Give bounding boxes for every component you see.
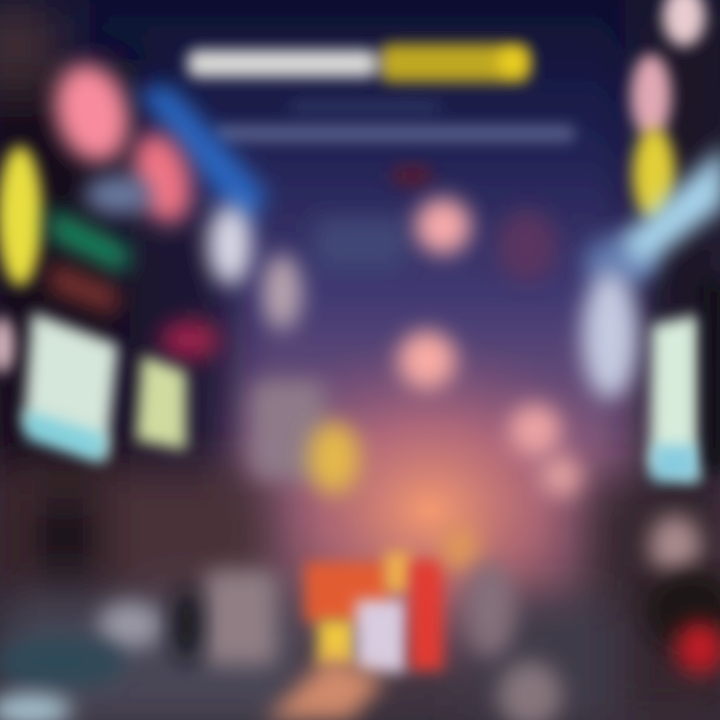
marker: mauve xyxy=(497,210,557,282)
sign: blue grey xyxy=(84,175,152,215)
street: dark car xyxy=(645,570,720,650)
street: crowd lower xyxy=(498,661,562,720)
sign: yellow xyxy=(633,128,675,220)
left signs xyxy=(0,55,360,494)
left dark building mass xyxy=(0,0,300,720)
sign: grey tower xyxy=(250,380,325,480)
street: grey block left xyxy=(205,570,277,665)
bar: red xyxy=(410,560,443,670)
sign: pink large xyxy=(44,55,140,171)
subtitle line two xyxy=(215,126,575,141)
central orange glow xyxy=(215,335,645,685)
sign: red-brown xyxy=(50,262,120,315)
sign: pale blue diagonal xyxy=(620,145,720,270)
marker: faint blue text block xyxy=(315,218,405,270)
sign: pink small xyxy=(124,127,200,229)
sign: yellow xyxy=(0,146,42,286)
bottom street scene xyxy=(0,515,720,720)
sign: white teal panel xyxy=(24,312,118,460)
street: pale block xyxy=(98,601,162,649)
street: road light xyxy=(265,655,385,720)
title white segment xyxy=(188,50,376,77)
sign: pale pink xyxy=(262,254,302,330)
sign: yellow green panel xyxy=(136,355,186,450)
street: dark figure xyxy=(173,587,201,663)
bar: yellow xyxy=(318,620,354,666)
sign: magenta xyxy=(160,320,220,360)
bar: orange red xyxy=(305,562,390,622)
right dark building mass xyxy=(470,0,720,720)
sign: white teal panel xyxy=(650,315,698,480)
title yellow segment xyxy=(380,44,530,82)
street: crowd figure xyxy=(464,562,516,658)
marker: pink three xyxy=(509,404,561,456)
sign: right dark strip xyxy=(704,280,720,470)
title xyxy=(188,44,530,82)
sign: teal panel base xyxy=(24,410,106,462)
sign: blue diagonal xyxy=(135,85,268,228)
centre pink markers xyxy=(315,164,582,497)
bar: lavender white xyxy=(356,600,406,672)
marker: pink two xyxy=(398,331,456,389)
sign: top white xyxy=(663,0,705,46)
subtitle xyxy=(215,102,575,141)
street: pale figure right xyxy=(649,515,701,575)
sign: teal base xyxy=(652,445,698,481)
bar: amber right xyxy=(442,526,478,570)
sign: left edge white xyxy=(0,317,14,373)
bottom centre bars xyxy=(305,526,478,672)
sign: green xyxy=(50,208,130,275)
sign: pale pink xyxy=(631,54,671,138)
marker: dark red top xyxy=(390,164,434,188)
marker: pink four xyxy=(540,455,582,497)
subtitle line one xyxy=(290,102,440,111)
sign: blue band xyxy=(584,236,656,288)
title highlight xyxy=(498,49,526,75)
bar: amber top xyxy=(385,552,411,592)
sign: white xyxy=(208,205,252,285)
street: car highlight xyxy=(0,694,72,720)
street: car teal xyxy=(0,637,125,687)
marker: pink one xyxy=(415,198,471,254)
street: red tail light xyxy=(676,622,720,674)
sign: amber xyxy=(308,422,360,494)
sign: grey blue xyxy=(582,271,638,399)
right signs xyxy=(582,0,720,481)
